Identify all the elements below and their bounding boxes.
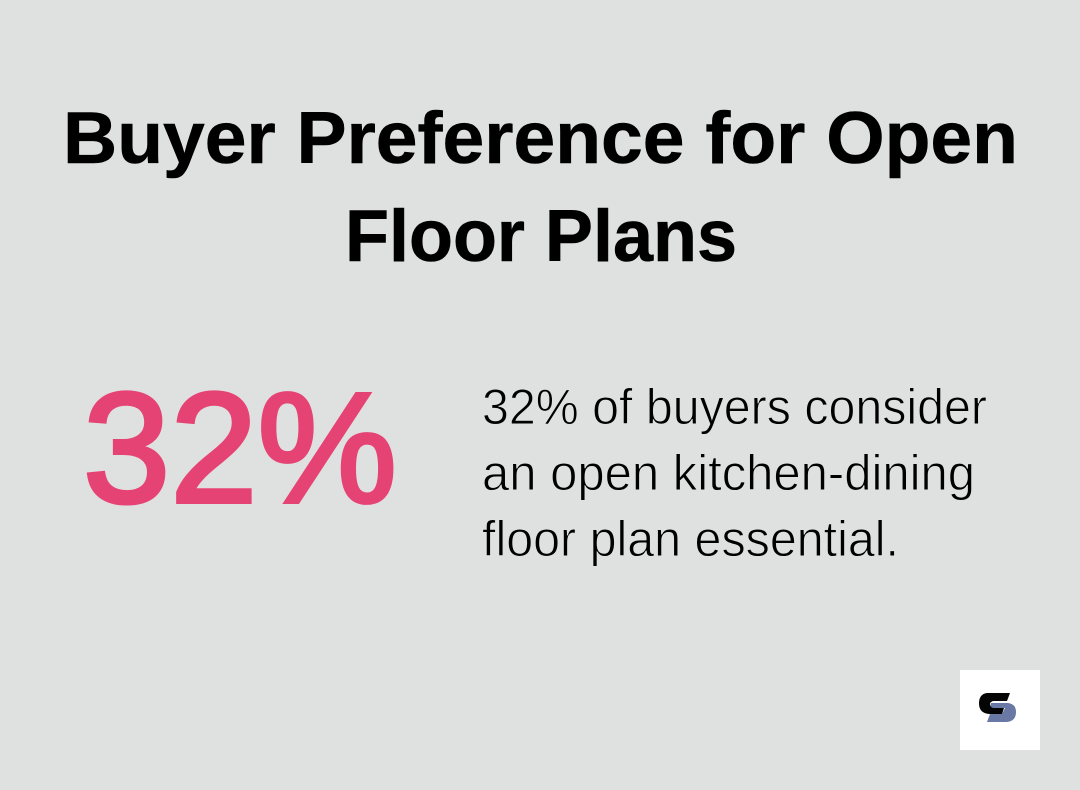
title: [63, 98, 1018, 277]
description text: floor plan essential.: [482, 511, 899, 567]
title: Floor Plans: [345, 196, 737, 277]
title: Buyer Preference for Open: [63, 98, 1018, 179]
logo: blue lower S shape: [987, 703, 1016, 722]
big statistic: 32%: [83, 361, 397, 536]
description text: [482, 379, 987, 567]
description text: 32% of buyers consider: [482, 379, 987, 435]
logo badge: [960, 670, 1040, 750]
description text: an open kitchen-dining: [482, 445, 975, 501]
logo: black upper S shape: [979, 693, 1010, 714]
